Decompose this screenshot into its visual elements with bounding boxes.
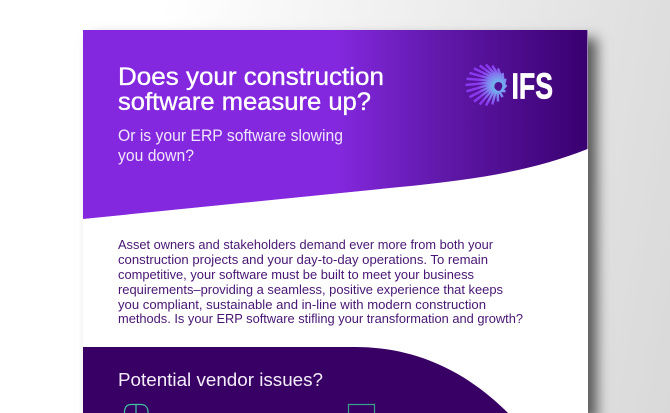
- subtitle: you down?: [118, 147, 194, 165]
- icon: radial spiral mark: [466, 64, 506, 106]
- intro paragraph: requirements–providing a seamless, positive experience that keeps: [118, 283, 503, 297]
- title: software measure up?: [118, 88, 371, 116]
- intro paragraph: [118, 238, 523, 326]
- icon: rounded split shape: [124, 404, 148, 413]
- IFS logo: [466, 64, 553, 106]
- page sheet: [83, 30, 588, 413]
- panel: potential vendor issues: [83, 347, 508, 413]
- header band: [83, 30, 588, 219]
- title: Does your construction: [118, 63, 384, 91]
- logo wordmark: IFS: [512, 66, 553, 106]
- intro paragraph: Asset owners and stakeholders demand ever more from both your: [118, 238, 494, 252]
- icon: square outline: [348, 404, 374, 413]
- subtitle: [118, 127, 343, 165]
- subtitle: Or is your ERP software slowing: [118, 127, 343, 145]
- panel background: [83, 347, 508, 413]
- title: [118, 63, 384, 116]
- panel heading: Potential vendor issues?: [118, 369, 323, 390]
- intro paragraph: methods. Is your ERP software stifling your transformation and growth?: [118, 312, 523, 326]
- intro paragraph: construction projects and your day-to-day operations. To remain: [118, 253, 488, 267]
- intro paragraph: competitive, your software must be built to meet your business: [118, 268, 474, 282]
- intro paragraph: you compliant, sustainable and in-line with modern construction: [118, 298, 486, 312]
